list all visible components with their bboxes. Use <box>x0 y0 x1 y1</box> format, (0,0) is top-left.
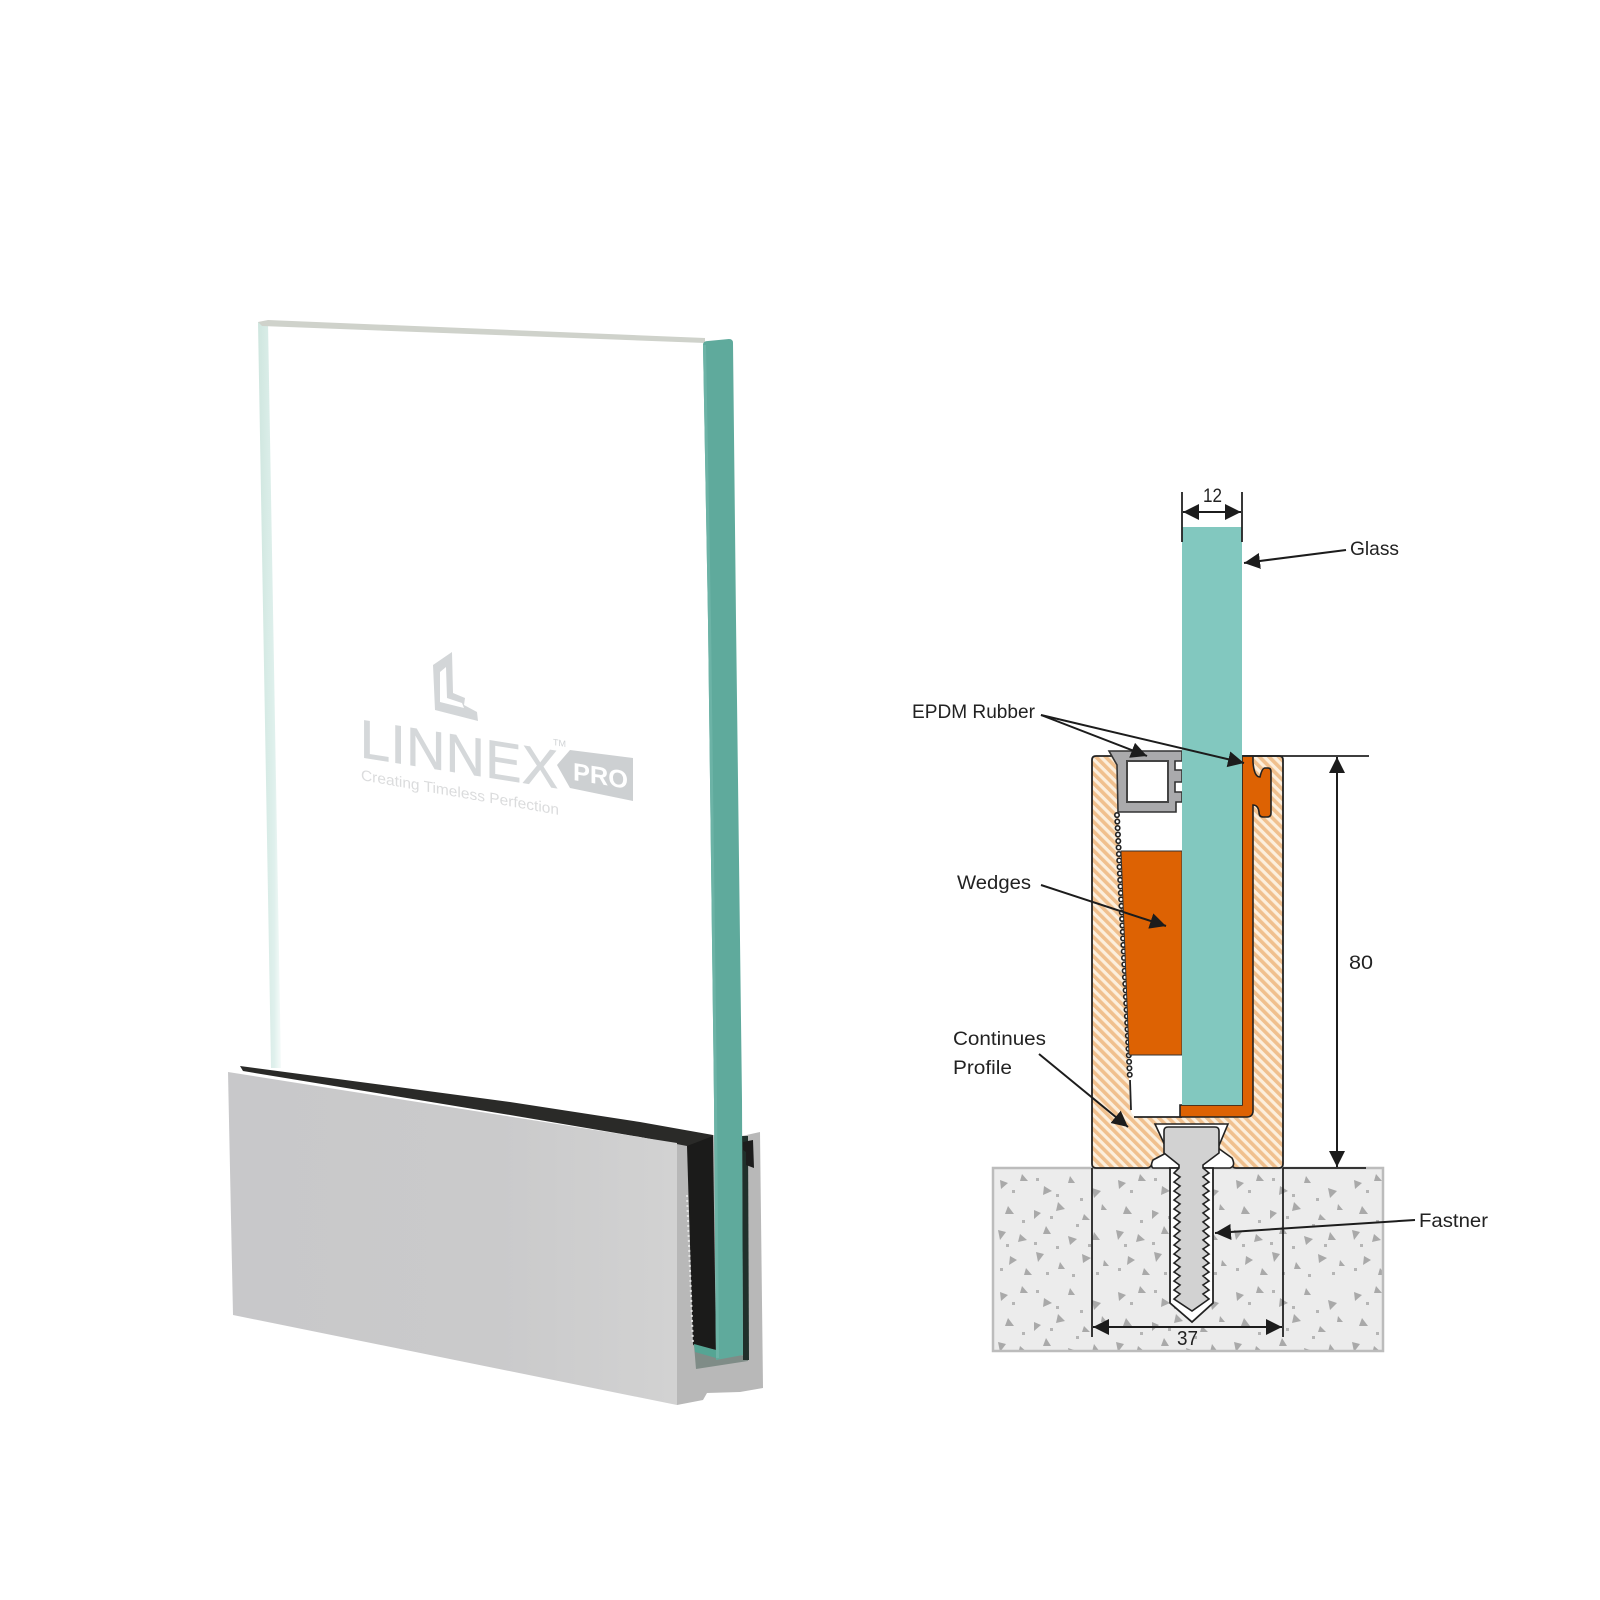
label: EPDM Rubber: EPDM Rubber <box>912 701 1035 723</box>
cavity floor line <box>1134 1116 1182 1118</box>
continuous profile <box>1092 756 1283 1168</box>
PRO badge: PRO <box>573 758 628 795</box>
threaded hole <box>1170 1168 1213 1322</box>
concrete slab <box>993 1168 1383 1351</box>
label: Continues Profile <box>953 1028 1128 1127</box>
wedge <box>1121 851 1182 1055</box>
glass edge highlight <box>703 345 719 1358</box>
cross-section diagram <box>912 485 1489 1351</box>
glass panel top edge <box>258 320 705 343</box>
glass teal edge <box>703 339 743 1360</box>
dark gap right of glass <box>742 1136 749 1360</box>
logo on glass <box>360 652 633 819</box>
label: Continues Profile: Continues <box>953 1028 1046 1050</box>
label: Fastner: Fastner <box>1419 1210 1489 1232</box>
trademark: TM <box>553 737 566 749</box>
product photo: glass panel in aluminium base <box>228 320 763 1405</box>
screw body <box>1164 1127 1219 1311</box>
logo tagline: Creating Timeless Perfection <box>361 767 559 819</box>
label: EPDM Rubber <box>912 701 1244 763</box>
dimension 12: 12 <box>1203 485 1222 507</box>
countersink <box>1152 1124 1234 1168</box>
black gasket strip along base top <box>240 1066 713 1148</box>
gasket hollow <box>1127 761 1168 802</box>
label: Wedges <box>957 872 1166 926</box>
EPDM rubber L-shape right <box>1180 756 1271 1117</box>
label: Continues Profile: Profile <box>953 1057 1012 1079</box>
base front face <box>228 1072 677 1405</box>
serrated wall <box>1117 815 1130 1080</box>
glass section <box>1182 527 1242 1105</box>
right gasket <box>743 1140 754 1168</box>
dimension 80: 80 <box>1349 952 1373 974</box>
fastener <box>1152 1124 1234 1322</box>
PRO badge <box>557 750 633 801</box>
logo wordmark: LINNEX <box>360 708 558 800</box>
label: Wedges: Wedges <box>957 872 1031 894</box>
base width extension lines <box>1092 1168 1283 1337</box>
cavity left wall line <box>1130 1080 1131 1110</box>
profile cavity <box>1116 752 1246 1117</box>
black interior of the profile <box>687 1136 716 1350</box>
base end section <box>677 1132 763 1405</box>
serrated interior wall <box>687 1195 693 1345</box>
dimension 37: 37 <box>1177 1328 1198 1350</box>
teal strip at glass foot <box>694 1344 716 1358</box>
dimension 12 <box>1182 485 1242 542</box>
label: Glass: Glass <box>1350 538 1399 560</box>
label: Fastner <box>1215 1210 1489 1233</box>
EPDM rubber gasket left <box>1109 751 1182 812</box>
glass panel left edge <box>258 322 281 1068</box>
logo mark <box>433 652 478 721</box>
profile channel floor <box>694 1345 748 1369</box>
label: Glass <box>1244 538 1399 563</box>
